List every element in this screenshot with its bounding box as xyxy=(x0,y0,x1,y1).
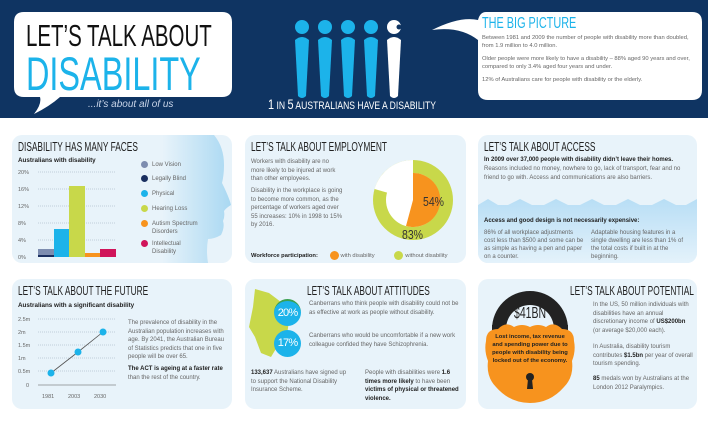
stat circle 17% xyxy=(274,330,301,357)
stat circle 20% xyxy=(274,299,301,326)
stat: 1 in 5: 1 IN 5 AUSTRALIANS HAVE A DISABILITY xyxy=(268,96,436,112)
panel: access: Adaptable housing features in a single dwelling are less than 1% of the total costs if built in at the beginning. xyxy=(591,230,683,260)
panel: employment xyxy=(245,135,466,263)
legend xyxy=(141,161,198,255)
line chart: 2m xyxy=(18,330,26,336)
line chart: 1m xyxy=(18,356,26,362)
title: LET’S TALK ABOUT xyxy=(26,18,212,53)
panel: attitudes xyxy=(245,279,466,409)
bar chart: 20% xyxy=(18,170,29,176)
panel: attitudes: 133,637 Australians have signed up to support the National Disability Insurance Scheme. xyxy=(251,370,346,393)
icon: head silhouette xyxy=(171,135,231,263)
panel: disability has many faces: DISABILITY HAS MANY FACES xyxy=(18,139,138,154)
panel: employment: LET’S TALK ABOUT EMPLOYMENT xyxy=(251,139,387,154)
panel: potential: In the US, 50 million individuals with disabilities have an annual discretionary income of US$200bn (or average $20,000 each). xyxy=(593,302,689,334)
donut chart: 54% xyxy=(423,194,444,209)
panel: potential xyxy=(478,279,697,409)
panel: future xyxy=(12,279,232,409)
icon: padlock xyxy=(485,291,575,403)
bar chart: 8% xyxy=(18,221,26,227)
bar chart: 0% xyxy=(18,255,26,261)
panel: disability has many faces: Legally Blind xyxy=(152,176,186,182)
big picture bubble: THE BIG PICTURE xyxy=(482,15,576,32)
stat circle 20%: 20% xyxy=(278,307,297,319)
line chart xyxy=(18,317,116,400)
panel: access: LET’S TALK ABOUT ACCESS xyxy=(484,139,595,154)
panel: disability has many faces: Autism Spectrum xyxy=(152,221,198,227)
big picture bubble xyxy=(432,12,702,100)
panel: potential: LET’S TALK ABOUT POTENTIAL xyxy=(570,283,694,298)
line chart: 0.5m xyxy=(18,369,31,375)
title: DISABILITY xyxy=(26,47,201,100)
line chart: 2030 xyxy=(94,394,106,400)
panel: future: LET’S TALK ABOUT THE FUTURE xyxy=(18,283,148,298)
line chart: 2003 xyxy=(68,394,80,400)
big picture bubble: Older people were more likely to have a disability – 88% aged 90 years and over, compared to only 3.4% aged four years and under. xyxy=(482,56,690,70)
panel: employment: Disability in the workplace is going to become more common, as the percentage of workers aged over 55 increases: 10% in 1998 to 15% by 2016. xyxy=(251,188,342,228)
panel: attitudes: Canberrans who would be uncomfortable if a new work colleague confided they have Schizophrenia. xyxy=(309,333,455,348)
panel: disability has many faces: Intellectual xyxy=(152,241,181,247)
line chart: 0 xyxy=(26,383,29,389)
legend: workforce participation xyxy=(251,251,448,260)
bar chart: 16% xyxy=(18,187,29,193)
panel: attitudes: People with disabilities were 1.6 times more likely to have been victims of physical or threatened violence. xyxy=(365,370,459,402)
panel: disability has many faces: Australians with disability xyxy=(18,157,96,164)
panel: disability has many faces: Hearing Loss xyxy=(152,206,187,212)
icon: padlock: $41BN xyxy=(514,305,546,322)
line chart: 1981 xyxy=(42,394,54,400)
panel: access xyxy=(478,135,697,263)
panel: disability has many faces xyxy=(12,135,232,263)
panel: access: Reasons included no money, nowhere to go, lack of transport, fear and no friend to go with. Access and communications are also barriers. xyxy=(484,166,680,180)
panel: potential: 85 medals won by Australians at the London 2012 Paralympics. xyxy=(593,376,689,390)
legend: workforce participation: Workforce participation: with disability without disability xyxy=(251,253,448,259)
header band xyxy=(0,0,708,118)
panel: disability has many faces: Low Vision xyxy=(152,162,181,168)
icon: padlock: Lost income, tax revenue and spending power due to people with disability being locked out of the economy. xyxy=(492,334,568,364)
big picture bubble: Between 1981 and 2009 the number of people with disability more than doubled, from 1.9 million to 4.0 million. xyxy=(482,35,689,49)
icon: people figures xyxy=(295,20,401,98)
icon: ACT map xyxy=(249,289,288,357)
bar chart: 4% xyxy=(18,238,26,244)
line chart: 1.5m xyxy=(18,343,31,349)
houses band xyxy=(478,199,697,262)
panel: disability has many faces: Disability xyxy=(152,249,176,255)
panel: future: The ACT is ageing at a faster rate than the rest of the country. xyxy=(128,366,223,380)
bar chart: 12% xyxy=(18,204,29,210)
panel: access: In 2009 over 37,000 people with disability didn’t leave their homes. xyxy=(484,157,673,163)
panel: access: 86% of all workplace adjustments cost less than $500 and some can be as simple as having a pen and paper on a counter. xyxy=(484,230,583,260)
panel: employment: Workers with disability are no more likely to be injured at work than other employees. xyxy=(251,159,335,182)
panel: access: Access and good design is not necessarily expensive: xyxy=(484,218,639,224)
panel: disability has many faces: Physical xyxy=(152,191,174,197)
title xyxy=(26,18,212,100)
panel: disability has many faces: Disorders xyxy=(152,229,178,235)
panel: attitudes: LET’S TALK ABOUT ATTITUDES xyxy=(307,283,430,298)
panel: future: Australians with a significant disability xyxy=(18,302,134,309)
panel: potential: In Australia, disability tourism contributes $1.5bn per year of overall tourism spending. xyxy=(593,344,693,367)
panel: future: The prevalence of disability in the Australian population increases with age. By 2041, the Australian Bureau of Statistics predicts that one in five people will be over 65. xyxy=(128,320,224,360)
tagline: ...it’s about all of us xyxy=(88,99,173,110)
line chart: 2.5m xyxy=(18,317,31,323)
donut chart xyxy=(373,160,453,240)
panel: attitudes: Canberrans who think people with disability could not be as effective at work as people without disability. xyxy=(309,301,458,316)
stat circle 17%: 17% xyxy=(278,337,297,349)
bar chart xyxy=(18,170,116,261)
big picture bubble: 12% of Australians care for people with disability or the elderly. xyxy=(482,77,642,83)
title speech bubble xyxy=(14,12,232,114)
